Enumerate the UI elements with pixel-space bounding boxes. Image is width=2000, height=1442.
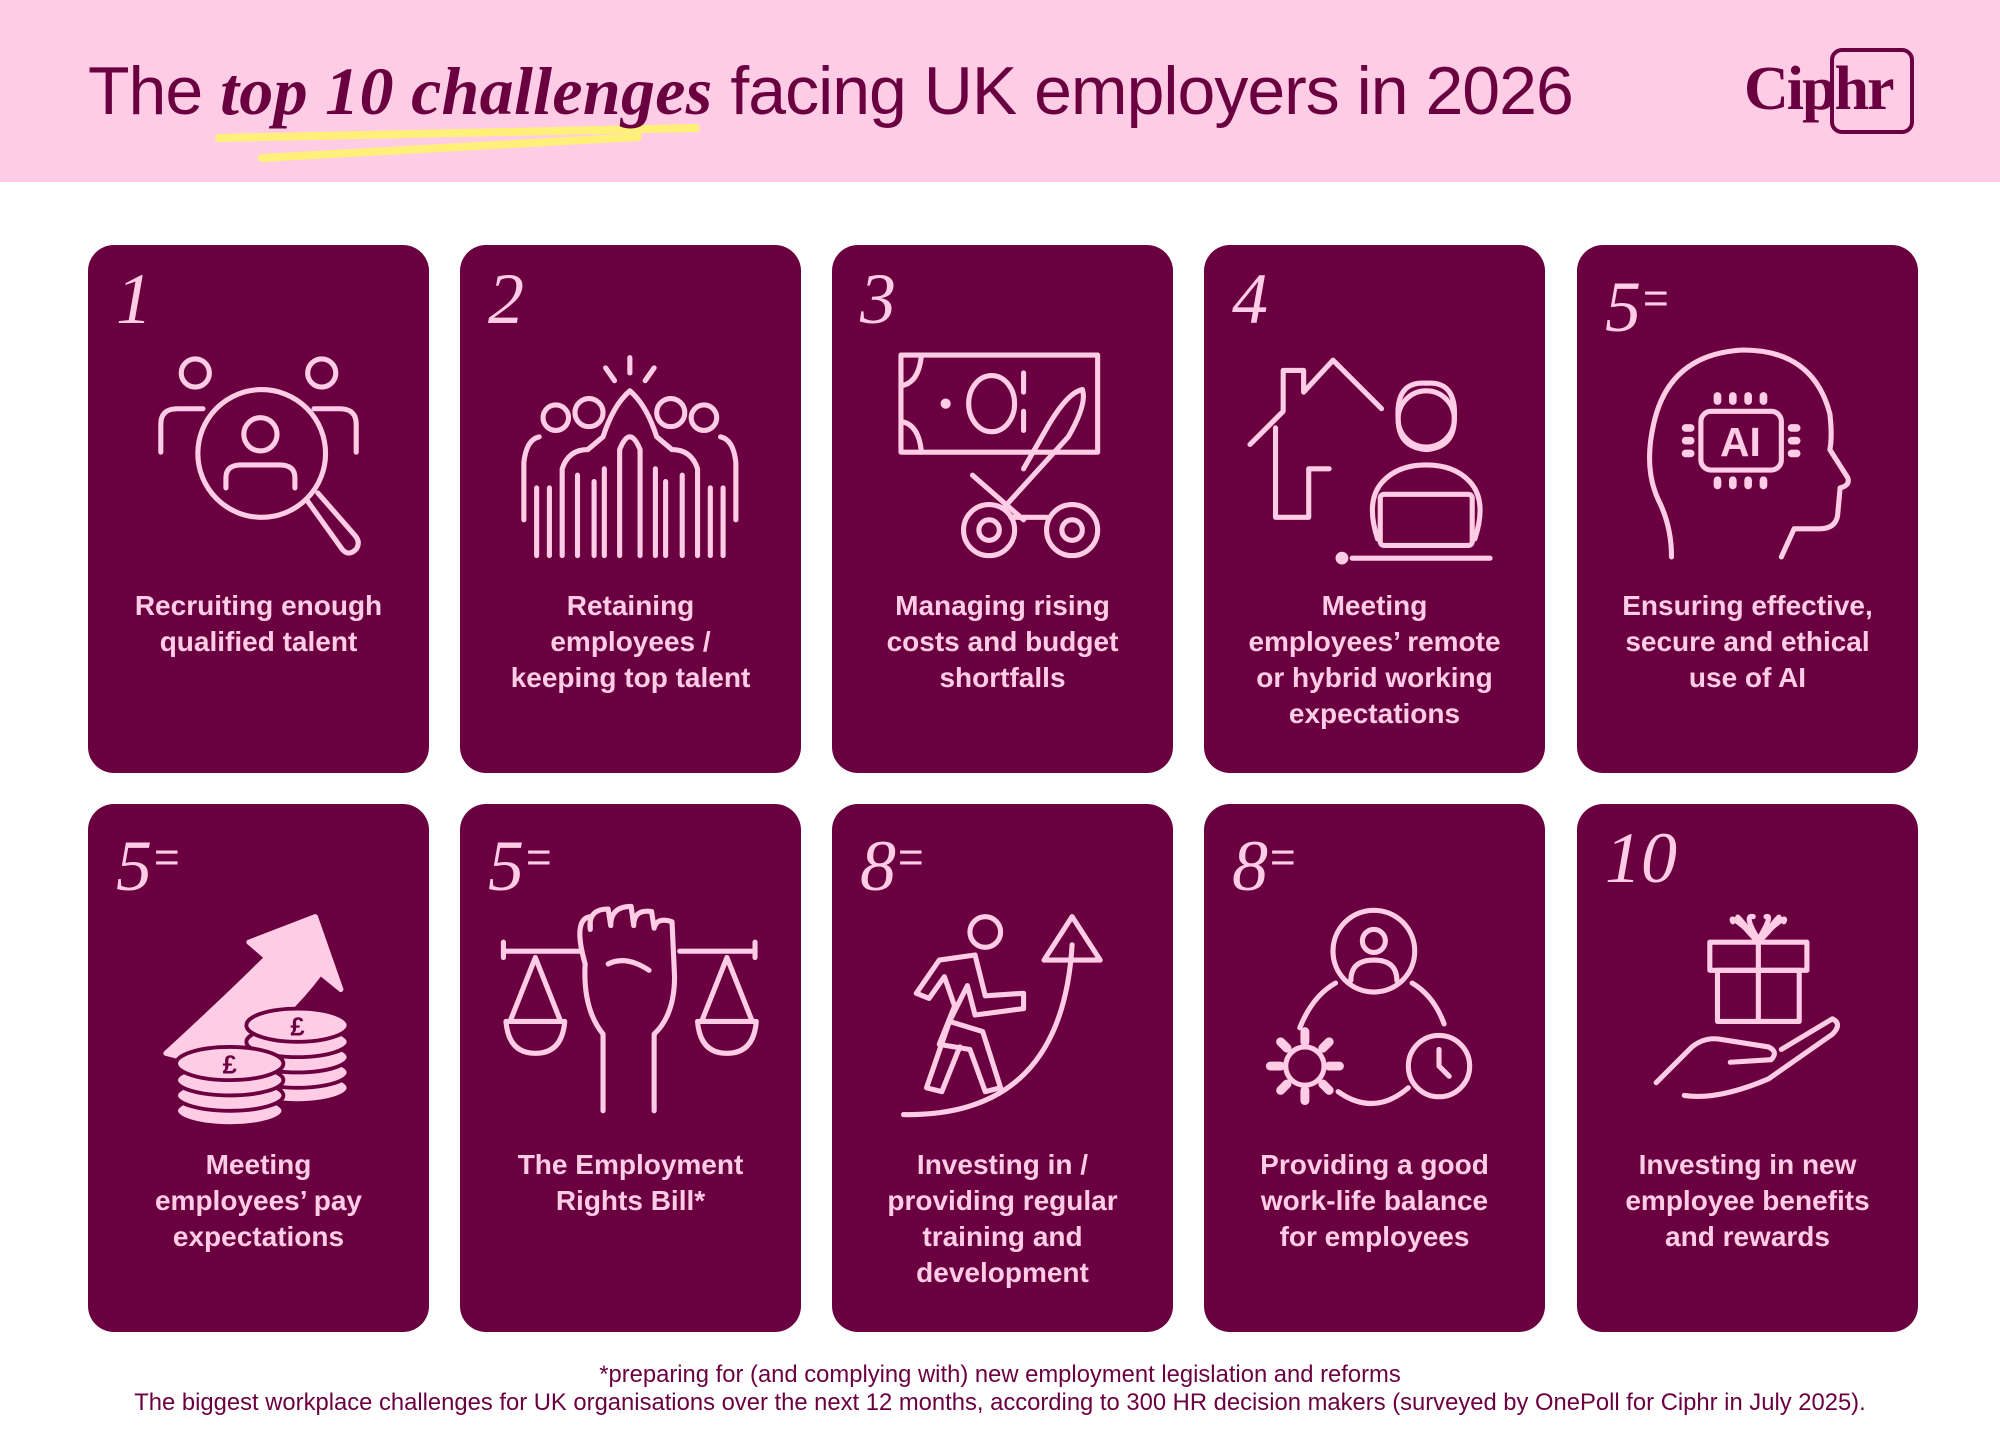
- card 8: Investing in / providing regular training and development: [887, 1149, 1118, 1288]
- card 1: [88, 245, 429, 773]
- card 1: 1: [116, 259, 152, 339]
- card 2: Retaining employees / keeping top talent: [511, 590, 750, 693]
- card 8: 8=: [860, 826, 924, 906]
- card 10: Investing in new employee benefits and rewards: [1625, 1149, 1870, 1252]
- card 5: Ensuring effective, secure and ethical use of AI: [1622, 590, 1873, 693]
- card 10: 10: [1605, 818, 1677, 898]
- footnote: *preparing for (and complying with) new employment legislation and reforms: [599, 1361, 1401, 1388]
- icon: pay coins arrow: £: [223, 1052, 237, 1080]
- card 5: 5=: [1605, 267, 1669, 347]
- logo: Ciphr: Ciphr: [1744, 55, 1892, 123]
- icon: fist and scales: [500, 904, 759, 1114]
- card 8: [832, 804, 1173, 1332]
- card 5: [1577, 245, 1918, 773]
- icon: pay coins arrow: [163, 914, 347, 1124]
- card 2: 2: [488, 259, 524, 339]
- title: The top 10 challenges facing UK employers in 2026: [88, 53, 1573, 129]
- card 9: [1204, 804, 1545, 1332]
- card 4: Meeting employees’ remote or hybrid working expectations: [1248, 590, 1501, 729]
- header band: [0, 0, 2000, 182]
- icon: work-life balance: [1266, 908, 1472, 1106]
- icon: AI head: [1647, 348, 1851, 560]
- icon: home working: [1247, 358, 1493, 564]
- card 2: [460, 245, 801, 773]
- card 9: Providing a good work-life balance for employees: [1260, 1149, 1489, 1252]
- card 4: 4: [1232, 259, 1268, 339]
- icon: AI head: AI: [1720, 419, 1761, 465]
- card 9: 8=: [1232, 826, 1296, 906]
- card 10: [1577, 804, 1918, 1332]
- card 3: 3: [860, 259, 896, 339]
- card 6: Meeting employees’ pay expectations: [155, 1149, 362, 1252]
- card 7: 5=: [488, 826, 552, 906]
- card 3: Managing rising costs and budget shortfalls: [887, 590, 1118, 693]
- logo: Ciphr: [1744, 48, 1914, 134]
- icon: pay coins arrow: £: [290, 1013, 305, 1041]
- card 7: The Employment Rights Bill*: [518, 1149, 743, 1216]
- card 6: [88, 804, 429, 1332]
- card 1: Recruiting enough qualified talent: [135, 590, 382, 657]
- icon: runner and arrow: [901, 914, 1103, 1118]
- icon: high five team: [521, 355, 738, 558]
- icon: gift in hand: [1654, 914, 1840, 1099]
- icon: recruiting magnifier: [158, 356, 361, 556]
- card 4: [1204, 245, 1545, 773]
- card 3: [832, 245, 1173, 773]
- card 7: [460, 804, 801, 1332]
- icon: banknote and scissors: [898, 352, 1100, 558]
- card 6: 5=: [116, 826, 180, 906]
- source text: The biggest workplace challenges for UK organisations over the next 12 months, according to 300 HR decision makers (surveyed by OnePoll for Ciphr in July 2025).: [134, 1389, 1866, 1416]
- highlight underline: [215, 124, 700, 162]
